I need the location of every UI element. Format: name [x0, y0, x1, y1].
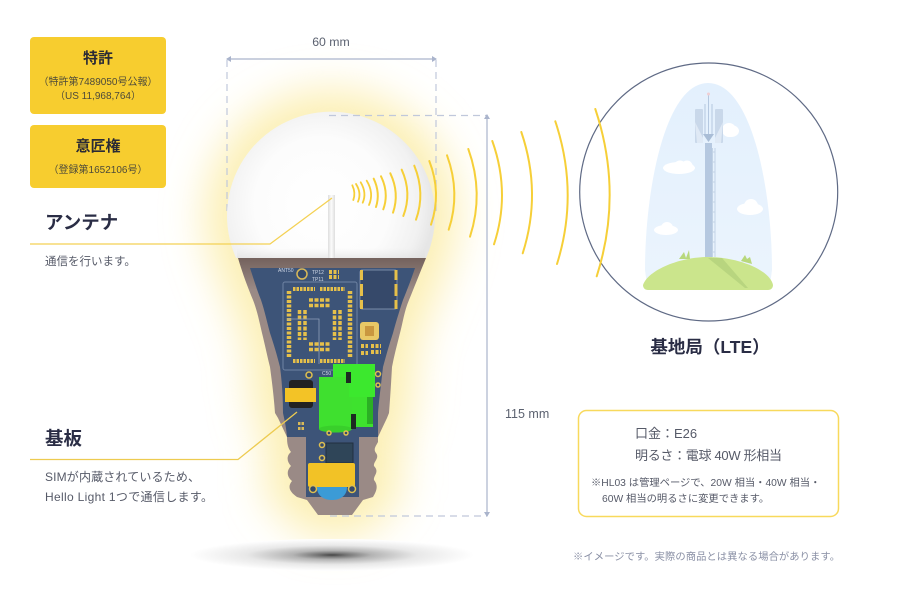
- board description: Hello Light 1つで通信します。: [45, 490, 213, 504]
- station circle: [580, 63, 838, 321]
- SIM chip: [360, 322, 379, 340]
- circuit board: [250, 268, 415, 500]
- board silk labels: C50: [322, 371, 331, 377]
- disclaimer note: ※イメージです。実際の商品とは異なる場合があります。: [573, 550, 840, 563]
- board description: [45, 469, 213, 504]
- radio waves: [352, 109, 610, 276]
- sky dome: [645, 83, 772, 285]
- solder rings: [306, 372, 380, 492]
- antenna description: 通信を行います。: [45, 254, 136, 268]
- height dimension 115 mm: [329, 114, 549, 517]
- patent badge: [30, 37, 166, 114]
- internal antenna rod: [328, 195, 335, 258]
- bulb light glow: [227, 112, 435, 515]
- blue varistor: [317, 487, 347, 500]
- specification box: 口金：E26: [635, 426, 697, 441]
- bulb glass: [227, 112, 435, 258]
- callout line: antenna: [30, 198, 332, 244]
- station label: 基地局（LTE）: [650, 337, 770, 357]
- communication module: [283, 282, 357, 370]
- floor shadow: [190, 539, 474, 571]
- tower mast: [705, 92, 715, 258]
- board silk labels: [278, 268, 331, 377]
- patent badge: （特許第7489050号公報）: [39, 75, 157, 88]
- green capacitors: [319, 364, 375, 432]
- base station illustration: [643, 83, 773, 290]
- clouds: [654, 123, 763, 235]
- specification box: 明るさ：電球 40W 形相当: [635, 448, 782, 463]
- height dimension 115 mm: 115 mm: [505, 407, 549, 421]
- specification box: [578, 410, 838, 516]
- design right badge: 意匠権: [75, 137, 121, 155]
- design right badge: [30, 125, 166, 188]
- small gold pads: [298, 424, 304, 428]
- design right badge: （登録第1652106号）: [49, 163, 147, 176]
- board silk labels: TP12: [312, 270, 324, 276]
- patent badge: 特許: [83, 49, 113, 67]
- grass tufts: [679, 250, 752, 264]
- yellow film capacitor: [308, 463, 355, 487]
- mount ring: [297, 269, 307, 279]
- lower chip: [326, 443, 353, 463]
- specification box: 60W 相当の明るさに変更できます。: [602, 492, 769, 505]
- patent badge: （US 11,968,764）: [55, 90, 141, 102]
- specification box: ※HL03 は管理ページで、20W 相当・40W 相当・: [591, 476, 820, 489]
- board heading: 基板: [45, 428, 83, 449]
- board silk labels: TP11: [312, 277, 324, 283]
- GPS antenna chip: [360, 270, 397, 309]
- width dimension 60 mm: 60 mm: [312, 35, 350, 49]
- board silk labels: ANT50: [278, 268, 294, 274]
- callout line: board: [30, 412, 297, 460]
- antenna heading: アンテナ: [45, 212, 118, 233]
- tower shadow on hill: [708, 258, 748, 288]
- grassy hill: [643, 257, 773, 290]
- tower antennas: [695, 109, 723, 143]
- small pads: [329, 272, 381, 353]
- board description: SIMが内蔵されているため、: [45, 469, 200, 484]
- bulb base housing: [238, 258, 426, 515]
- width dimension 60 mm: [226, 35, 437, 213]
- inductor: [285, 380, 316, 408]
